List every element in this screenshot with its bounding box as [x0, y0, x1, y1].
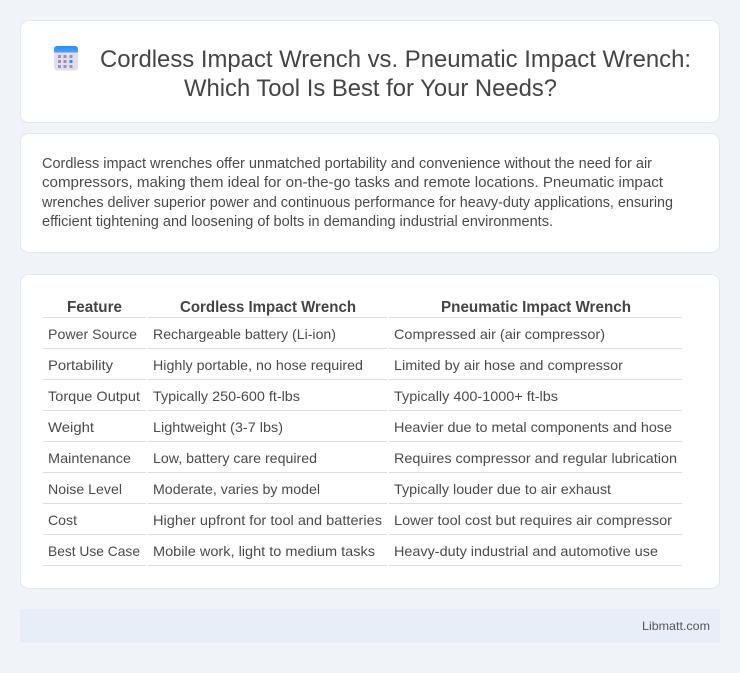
icon: calendar [54, 46, 78, 70]
row: cost: Higher upfront for tool and batteries [153, 512, 382, 528]
text block: introduction paragraph: wrenches deliver superior power and continuous performance for heavy-duty applications, ensuring [41, 195, 673, 211]
row: maintenance: Low, battery care required [153, 450, 317, 466]
title: Cordless Impact Wrench vs. Pneumatic Impact Wrench: [100, 46, 691, 73]
row: power source [48, 326, 605, 342]
row: noise level: Moderate, varies by model [153, 481, 320, 497]
row: portability: Highly portable, no hose required [153, 357, 363, 373]
panel: title card [20, 20, 720, 122]
row: portability [48, 357, 623, 373]
title: Which Tool Is Best for Your Needs? [184, 75, 557, 102]
row: weight: Weight [48, 419, 94, 435]
row: weight: Lightweight (3-7 lbs) [153, 419, 283, 435]
row: power source: Compressed air (air compressor) [394, 326, 605, 342]
row: power source: Rechargeable battery (Li-ion) [153, 326, 336, 342]
row: maintenance: Maintenance [48, 450, 131, 466]
row: weight [48, 419, 672, 435]
row: torque output: Typically 400-1000+ ft-lbs [394, 388, 558, 404]
row: torque output: Torque Output [48, 388, 140, 404]
footer: Libmatt.com [642, 619, 710, 633]
row: cost: Cost [48, 512, 77, 528]
row: power source: Power Source [48, 326, 137, 342]
row: best use case: Mobile work, light to medium tasks [153, 543, 375, 559]
row: portability: Portability [48, 357, 113, 373]
row: maintenance: Requires compressor and regular lubrication [394, 450, 677, 466]
row: noise level: Typically louder due to air exhaust [394, 481, 611, 497]
panel: comparison table [20, 274, 720, 588]
table header: Cordless Impact Wrench [180, 299, 356, 316]
table header [67, 299, 631, 316]
row: cost [48, 512, 672, 528]
panel: introduction [20, 134, 720, 252]
row: torque output: Typically 250-600 ft-lbs [153, 388, 300, 404]
row: maintenance [48, 450, 677, 466]
table header: Pneumatic Impact Wrench [441, 299, 631, 316]
text block: introduction paragraph: Cordless impact wrenches offer unmatched portability and convenience without the need for air [42, 156, 652, 172]
row: noise level [48, 481, 611, 497]
text block: introduction paragraph: compressors, making them ideal for on-the-go tasks and remote locations. Pneumatic impact [42, 175, 663, 191]
row: best use case: Best Use Case [48, 543, 140, 559]
footer [20, 609, 720, 643]
row: portability: Limited by air hose and compressor [394, 357, 623, 373]
text block: introduction paragraph [41, 156, 673, 230]
title [100, 46, 691, 102]
text block: introduction paragraph: efficient tightening and loosening of bolts in demanding industrial environments. [42, 214, 553, 230]
row: noise level: Noise Level [48, 481, 122, 497]
row: weight: Heavier due to metal components and hose [394, 419, 672, 435]
row: cost: Lower tool cost but requires air compressor [394, 512, 672, 528]
row: best use case [48, 543, 658, 559]
table header: Feature [67, 299, 122, 316]
row: best use case: Heavy-duty industrial and automotive use [394, 543, 658, 559]
row: torque output [48, 388, 558, 404]
